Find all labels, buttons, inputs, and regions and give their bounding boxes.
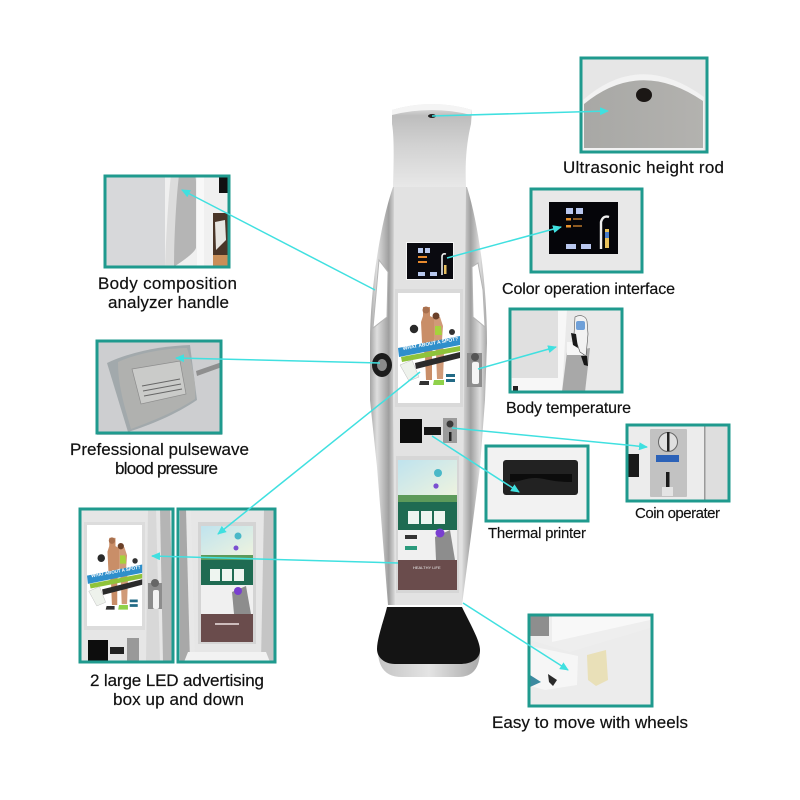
thermometer — [574, 316, 588, 356]
panel: ultrasonic height rod — [581, 58, 707, 152]
coin mechanism — [650, 429, 687, 497]
label: easy to move with wheels: Easy to move with wheels — [492, 713, 688, 732]
centre panel — [393, 187, 466, 605]
panel: coin operator — [627, 425, 730, 502]
panel: color operation interface — [530, 188, 643, 273]
printer slot — [503, 460, 578, 495]
leader lines — [152, 111, 647, 670]
arrow: body temperature — [478, 347, 556, 369]
interface screen — [549, 202, 618, 254]
panel: wheels — [528, 614, 653, 706]
panel: body temperature — [510, 309, 623, 393]
wheel — [587, 650, 608, 686]
kiosk machine — [370, 104, 487, 677]
arrow: height rod — [432, 111, 608, 116]
label: professional pulsewave blood pressure: blood pressure — [115, 459, 218, 478]
upper LED panel — [395, 289, 463, 407]
poster artwork: WHAT ABOUT A SPOT? — [91, 564, 141, 578]
panel: thermal printer — [485, 445, 588, 521]
vent holes — [548, 674, 557, 686]
poster fragment — [213, 213, 228, 255]
body shell — [370, 187, 487, 605]
arrow: handle — [182, 190, 375, 290]
poster artwork — [87, 537, 142, 610]
payment panel — [400, 418, 457, 443]
label: body temperature: Body temperature — [506, 400, 631, 417]
label: LED advertising — [90, 671, 264, 709]
cuff label — [132, 361, 186, 404]
arrow: lower LED — [152, 556, 398, 563]
panel: LED advertising right — [178, 509, 276, 662]
thermometer holder — [467, 353, 482, 387]
label: professional pulsewave blood pressure — [70, 440, 249, 478]
label: professional pulsewave blood pressure: Prefessional pulsewave — [70, 440, 249, 459]
weighing platform — [377, 607, 480, 677]
right handle — [472, 263, 485, 327]
label: body composition analyzer handle — [98, 274, 237, 312]
label: LED advertising: box up and down — [113, 690, 244, 709]
card reader block — [400, 419, 422, 443]
arrow: upper LED — [218, 372, 420, 534]
arrow: printer — [432, 436, 519, 492]
label: body composition analyzer handle: Body composition — [98, 274, 237, 293]
panel: LED advertising left — [79, 509, 174, 662]
coin slot — [443, 418, 457, 443]
label: color operation interface: Color operation interface — [502, 281, 675, 298]
label: LED advertising: 2 large LED advertising — [90, 671, 264, 690]
arrow: wheels — [463, 603, 568, 670]
sensor — [636, 88, 652, 102]
arrow: coin — [452, 428, 647, 447]
lower LED panel — [396, 456, 459, 593]
thermometer — [148, 583, 162, 609]
label: ultrasonic height rod: Ultrasonic height rod — [563, 158, 724, 177]
height rod head — [392, 104, 472, 187]
label: coin operater: Coin operater — [635, 505, 720, 522]
panel: body composition handle — [104, 175, 230, 268]
touch screen interface — [406, 242, 454, 280]
label: thermal printer: Thermal printer — [488, 525, 586, 542]
label: body composition analyzer handle: analyzer handle — [108, 293, 229, 312]
arrow: interface — [447, 227, 561, 258]
printer slot — [424, 427, 441, 435]
left handle — [373, 260, 388, 328]
panel: pulsewave cuff — [97, 341, 222, 435]
upper poster artwork: WHAT ABOUT A SPOT? — [402, 336, 459, 352]
arrow: blood pressure — [176, 358, 380, 363]
lower LED panel: HEALTHY LIFE — [413, 565, 441, 570]
blood pressure cuff ring — [372, 353, 392, 377]
